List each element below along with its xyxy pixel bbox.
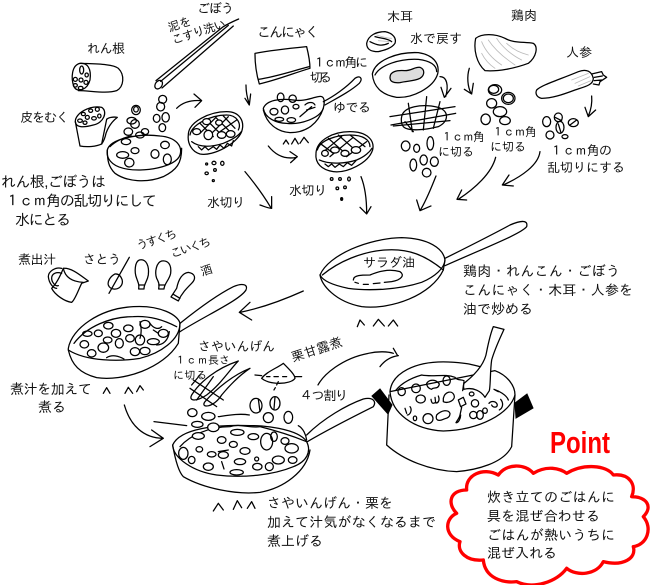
text: cloud tips: 混ぜ入れる xyxy=(487,545,557,561)
text: simmer until dry: さやいんげん・栗を xyxy=(267,495,393,511)
icon: strainer with vegetables xyxy=(188,112,243,182)
icon: konnyaku block xyxy=(255,47,310,84)
text: cut carrot xyxy=(547,143,625,175)
text: scrub off mud xyxy=(166,4,228,47)
text: cut chicken: １ｃｍ角 xyxy=(492,125,537,139)
text: seasonings xyxy=(18,227,214,279)
icon: dried wood ear xyxy=(367,32,395,52)
icon: carrot xyxy=(536,70,607,139)
text: carrot: 人参 xyxy=(566,45,592,60)
text: simmer with broth xyxy=(10,381,92,415)
icon: boiling pan xyxy=(263,77,361,133)
text: wood ear: 木耳 xyxy=(387,9,413,24)
text: cloud tips: 具を混ぜ合わせる xyxy=(487,508,600,524)
icon: pot left handle xyxy=(372,389,392,414)
text: cut carrot: 乱切りにする xyxy=(547,160,625,175)
icon: water bowl with cut vegetables xyxy=(107,105,182,181)
text: salad oil: サラダ油 xyxy=(363,255,415,270)
arrow: from strainer to frying pan xyxy=(245,172,272,208)
text: stir fry instructions: 油で炒める xyxy=(463,301,533,317)
text: cut konnyaku: 切る xyxy=(310,70,332,85)
icon: simmering pan xyxy=(68,284,247,378)
text: stir fry instructions xyxy=(463,263,633,317)
icon: sugar xyxy=(108,257,129,293)
icon: burdock root xyxy=(153,19,239,132)
text: cut instructions for lotus and burdock xyxy=(1,174,157,229)
text: cut chicken xyxy=(490,125,537,154)
text: seasonings: うすくち xyxy=(135,227,179,253)
text: seasonings: 酒 xyxy=(199,262,214,279)
text: drain 2: 水切り xyxy=(289,183,327,198)
text: green beans: に切る xyxy=(173,370,207,382)
arrow: frying pan to stew pan xyxy=(239,291,303,320)
text: stir fry instructions: 鶏肉・れんこん・ごぼう xyxy=(463,263,620,279)
icon: soaking bowl xyxy=(372,53,451,97)
text: quarter: ４つ割り xyxy=(300,388,348,403)
callout: red cloud xyxy=(448,466,648,585)
arrow: simmering pan to final pan xyxy=(124,405,163,447)
icon: draining drops and arrow xyxy=(330,177,371,214)
arrow: final pan to rice pot xyxy=(318,348,398,385)
text: stir fry instructions: こんにゃく・木耳・人参を xyxy=(463,282,633,298)
icon: green beans xyxy=(190,361,250,407)
text: drain 1: 水切り xyxy=(207,195,245,210)
icon: steam under final pan xyxy=(213,501,255,511)
text: green beans xyxy=(173,339,275,382)
icon: candied chestnut xyxy=(255,363,302,390)
text: simmer until dry xyxy=(267,495,436,549)
icon: steam xyxy=(283,137,308,144)
icon: steam under simmering pan xyxy=(103,386,143,393)
icon: frying pan with oil xyxy=(320,221,527,307)
text: cut carrot: １ｃｍ角の xyxy=(550,143,612,158)
text: cut konnyaku xyxy=(310,55,368,85)
text: renkon: れん根 xyxy=(87,41,125,56)
text: green beans: さやいんげん xyxy=(198,339,275,354)
text: seasonings: 煮出汁 xyxy=(18,252,56,267)
text: simmer until dry: 加えて汁気がなくなるまで xyxy=(267,514,436,530)
arrow: pan to strainer xyxy=(268,146,297,163)
text: cut chicken: に切る xyxy=(490,140,526,154)
text: candied chestnut: 栗甘露煮 xyxy=(289,334,344,365)
text: peel: 皮をむく xyxy=(20,110,69,125)
text: boil: ゆでる xyxy=(333,100,371,115)
heading: Point: Point xyxy=(550,425,610,460)
icon: lotus root xyxy=(72,63,123,92)
arrow: to strainer xyxy=(177,94,202,108)
text: cloud tips xyxy=(487,489,615,561)
text: seasonings: こいくち xyxy=(169,235,213,261)
icon: rice pot with ladle xyxy=(387,327,515,472)
icon: cutting wood ear xyxy=(390,97,456,211)
text: scrub off mud: 泥を xyxy=(166,14,193,35)
icon: light soy sauce bottle xyxy=(135,260,149,289)
icon: peeled lotus root xyxy=(75,107,117,147)
text: simmer until dry: 煮上げる xyxy=(267,533,323,549)
text: konnyaku: こんにゃく xyxy=(257,24,319,40)
icon: second strainer xyxy=(316,132,373,172)
text: scrub off mud: こすり洗い xyxy=(170,17,228,47)
icon: dashi jug xyxy=(48,268,88,302)
icon: dark soy sauce bottle xyxy=(156,261,171,289)
text: green beans: １ｃｍ長さ xyxy=(175,355,230,367)
text: simmer with broth: 煮汁を加えて xyxy=(10,381,92,397)
text: cut wood ear: １ｃｍ角 xyxy=(441,130,485,144)
icon: chicken xyxy=(464,35,536,125)
icon: final frying pan xyxy=(154,397,375,493)
arrow: konnyaku to pan xyxy=(245,85,251,105)
text: cut instructions for lotus and burdock: れん根,ごぼうは xyxy=(1,174,106,191)
icon: pot right handle xyxy=(515,394,533,418)
text: cut wood ear: に切る xyxy=(438,145,474,159)
text: cut instructions for lotus and burdock: 水にとる xyxy=(15,212,71,229)
text: cloud tips: ごはんが熱いうちに xyxy=(487,527,615,543)
icon: steam under frying pan xyxy=(357,319,398,327)
text: simmer with broth: 煮る xyxy=(38,399,66,415)
text: chicken: 鶏肉 xyxy=(511,8,537,23)
arrows: chicken and carrot to frying pan xyxy=(457,152,540,200)
text: cut wood ear xyxy=(438,130,485,159)
icon: sake bottle xyxy=(171,272,195,301)
text: gobou: ごぼう xyxy=(197,1,234,16)
text: cloud tips: 炊き立てのごはんに xyxy=(487,489,615,505)
text: soak: 水で戻す xyxy=(410,31,462,46)
text: cut instructions for lotus and burdock: １ｃｍ角の乱切りにして xyxy=(5,192,157,210)
text: seasonings: さとう xyxy=(83,252,121,267)
text: cut konnyaku: １ｃｍ角に xyxy=(313,55,368,70)
